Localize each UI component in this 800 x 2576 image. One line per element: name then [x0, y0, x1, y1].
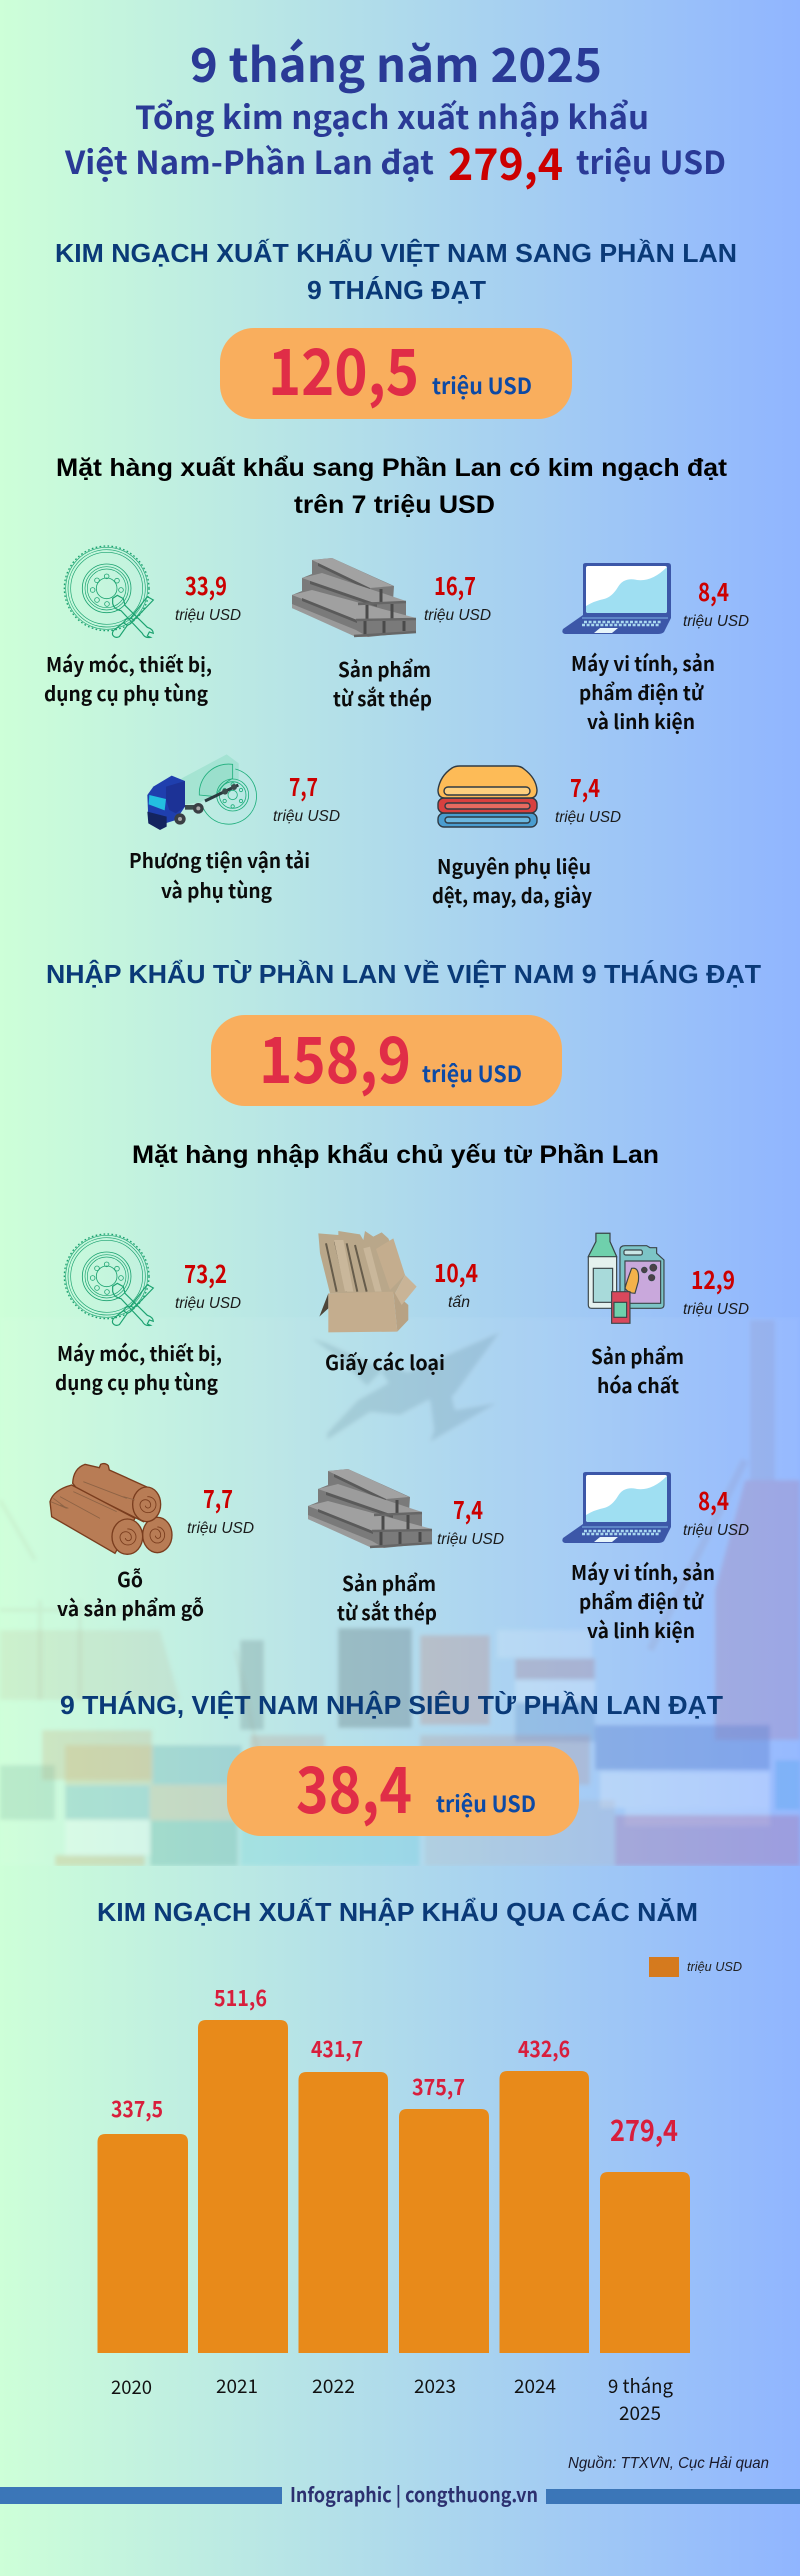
callout: deficit value: 38,4 [296, 1740, 412, 1832]
heading: exported goods: trên 7 triệu USD [294, 491, 495, 519]
icon: truck and brake disc [147, 754, 257, 830]
panel: import chemicals: triệu USD [683, 1301, 749, 1318]
year labels: 2025 [619, 2399, 661, 2426]
panel: export textile materials: dệt, may, da, giày [432, 880, 592, 909]
source note: Nguồn: TTXVN, Cục Hải quan [568, 2455, 769, 2472]
panel: import machinery: triệu USD [175, 1295, 241, 1312]
year labels: 2020 [111, 2373, 152, 2400]
panel: export textile materials: 7,4 [570, 769, 600, 805]
panel: import machinery: dụng cụ phụ tùng [55, 1367, 218, 1396]
icon: gear and wrench [64, 546, 153, 638]
panel: export steel [292, 558, 491, 712]
callout: deficit value [227, 1740, 579, 1836]
panel: export machinery: triệu USD [175, 607, 241, 624]
panel: export vehicles: và phụ tùng [161, 875, 272, 904]
panel: export vehicles: triệu USD [273, 808, 340, 825]
panel: export vehicles: 7,7 [289, 768, 318, 804]
panel: import wood: triệu USD [187, 1520, 254, 1537]
panel: import wood: 7,7 [203, 1480, 233, 1516]
panel: export computers [562, 563, 749, 735]
panel: import chemicals: Sản phẩm [591, 1341, 684, 1370]
panel: import chemicals: hóa chất [597, 1370, 680, 1399]
value labels: 375,7 [412, 2070, 465, 2102]
callout: export value: 120,5 [268, 322, 419, 414]
icon: chemical bottles [588, 1233, 664, 1323]
icon: laptop [562, 1472, 671, 1543]
heading: trade deficit: 9 THÁNG, VIỆT NAM NHẬP SIÊU TỪ PHẦN LAN ĐẠT [60, 1690, 723, 1720]
panel: export machinery: 33,9 [185, 567, 227, 603]
legend [649, 1957, 742, 1977]
heading: exported goods [56, 454, 728, 519]
icon: folded fabric [438, 766, 537, 827]
panel: import paper [318, 1231, 478, 1376]
value labels: 337,5 [111, 2092, 163, 2124]
year labels: 2022 [312, 2372, 355, 2399]
panel: import paper: 10,4 [434, 1254, 478, 1290]
panel: import wood [50, 1464, 254, 1622]
icon: cardboard box [318, 1231, 417, 1332]
panel: export steel: từ sắt thép [333, 683, 432, 712]
year labels: 2024 [514, 2372, 556, 2399]
panel: import steel: Sản phẩm [342, 1568, 436, 1597]
panel: import paper: tấn [448, 1294, 470, 1311]
panel: import computers: Máy vi tính, sản [571, 1557, 715, 1586]
callout: export value: triệu USD [432, 369, 532, 401]
heading: imported goods: Mặt hàng nhập khẩu chủ yếu từ Phần Lan [132, 1141, 659, 1169]
year labels [111, 2372, 673, 2426]
bars [98, 2020, 690, 2353]
value labels: 511,6 [214, 1981, 267, 2013]
panel: export computers: phẩm điện tử [579, 677, 704, 706]
subtitle line one: Tổng kim ngạch xuất nhập khẩu [135, 93, 649, 139]
footer bar [0, 2479, 800, 2508]
icon: steel beams [308, 1469, 432, 1548]
crane left [0, 1630, 180, 1700]
panel: import wood: Gỗ [117, 1564, 143, 1593]
panel: exports heading: KIM NGẠCH XUẤT KHẨU VIỆT NAM SANG PHẦN LAN [55, 238, 737, 268]
year labels: 2021 [216, 2372, 258, 2399]
callout: export value [220, 322, 572, 419]
value labels: 432,6 [518, 2032, 570, 2064]
year labels: 2023 [414, 2372, 456, 2399]
icon: gear and wrench [64, 1234, 153, 1326]
title block [64, 27, 726, 193]
total value: 279,4 [448, 129, 563, 193]
heading: chart title: KIM NGẠCH XUẤT NHẬP KHẨU QUA CÁC NĂM [97, 1897, 698, 1927]
value labels: 431,7 [311, 2032, 363, 2064]
panel: export machinery [44, 546, 241, 707]
panel: export steel: triệu USD [424, 607, 491, 624]
panel: import steel: từ sắt thép [337, 1597, 437, 1626]
icon: wooden logs [50, 1464, 172, 1554]
panel: import machinery: 73,2 [184, 1255, 227, 1291]
icon: steel beams [292, 558, 416, 637]
main title: 9 tháng năm 2025 [190, 27, 602, 96]
panel: import computers: 8,4 [698, 1482, 729, 1518]
icon: laptop [562, 563, 671, 634]
panel: import computers: triệu USD [683, 1522, 749, 1539]
value labels: 279,4 [610, 2108, 678, 2150]
panel: export computers: và linh kiện [587, 706, 695, 735]
background photo: port, plane, containers [0, 1317, 800, 1866]
panel: export textile materials: triệu USD [555, 809, 621, 826]
plane silhouette [311, 1332, 500, 1442]
panel: export computers: triệu USD [683, 613, 749, 630]
panel: export vehicles: Phương tiện vận tải [129, 845, 310, 874]
panel: import paper: Giấy các loại [325, 1347, 445, 1376]
panel: import steel: triệu USD [437, 1531, 504, 1548]
panel: import chemicals: 12,9 [691, 1261, 735, 1297]
panel: export computers: 8,4 [698, 573, 729, 609]
panel: export computers: Máy vi tính, sản [571, 648, 715, 677]
panel: export steel: 16,7 [434, 567, 476, 603]
legend: triệu USD [687, 1959, 742, 1974]
callout: deficit value: triệu USD [436, 1787, 536, 1819]
crane right [715, 1480, 800, 1740]
footer bar: Infographic | congthuong.vn [290, 2479, 538, 2508]
callout: import value: triệu USD [422, 1057, 522, 1089]
panel: import steel [308, 1469, 504, 1626]
panel: import computers: và linh kiện [587, 1615, 695, 1644]
total unit: triệu USD [576, 138, 726, 184]
panel: import machinery: Máy móc, thiết bị, [57, 1338, 222, 1367]
panel: import steel: 7,4 [453, 1491, 483, 1527]
callout: import value [211, 1010, 562, 1106]
panel: import computers: phẩm điện tử [579, 1586, 704, 1615]
panel: import wood: và sản phẩm gỗ [57, 1593, 204, 1622]
panel: export machinery: dụng cụ phụ tùng [44, 678, 208, 707]
heading: exported goods: Mặt hàng xuất khẩu sang Phần Lan có kim ngạch đạt [56, 454, 728, 482]
panel: export textile materials: Nguyên phụ liệu [437, 851, 591, 880]
callout: import value: 158,9 [259, 1010, 411, 1102]
subtitle line two: Việt Nam-Phần Lan đạt [64, 138, 434, 184]
panel: exports heading [55, 238, 737, 305]
year labels: 9 tháng [608, 2372, 673, 2399]
panel: import chemicals [588, 1233, 749, 1399]
panel: export vehicles [129, 754, 340, 904]
panel: import machinery [55, 1234, 241, 1396]
panel: export textile materials [432, 766, 621, 909]
panel: exports heading: 9 THÁNG ĐẠT [307, 275, 486, 305]
panel: export machinery: Máy móc, thiết bị, [46, 649, 212, 678]
bar chart [98, 1981, 690, 2426]
panel: export steel: Sản phẩm [338, 654, 431, 683]
container stacks [338, 1628, 412, 1728]
heading: imports: NHẬP KHẨU TỪ PHẦN LAN VỀ VIỆT NAM 9 THÁNG ĐẠT [46, 959, 761, 989]
panel: import computers [562, 1472, 749, 1644]
value labels [111, 1981, 678, 2150]
